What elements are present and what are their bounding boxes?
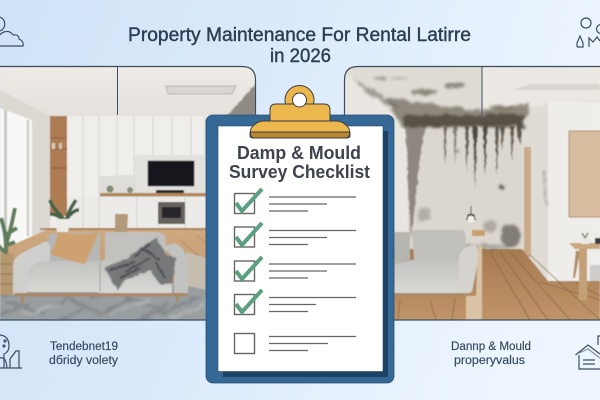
- ceiling: [344, 66, 600, 126]
- checklist heading: Survey Checklist: [229, 162, 370, 182]
- right ceiling and vent: [482, 66, 600, 108]
- sofa: [13, 232, 188, 303]
- caption: left: Tendebnet19: [50, 341, 118, 353]
- wooden shelf niche: [50, 116, 67, 216]
- clip: [250, 86, 350, 138]
- icon: house: [576, 336, 600, 369]
- left wall: [0, 90, 51, 237]
- caption: right: Dannp & Mould: [451, 341, 531, 353]
- desk and plant: [569, 233, 600, 300]
- checklist item 5 unchecked: [234, 334, 356, 354]
- checklist item 3: [234, 257, 356, 281]
- lower mould patches: [417, 148, 546, 250]
- ceiling air vent: [166, 86, 236, 94]
- rug side: [186, 252, 206, 290]
- rug: [0, 284, 206, 320]
- tan cushion: [50, 232, 98, 264]
- checklist item 1: [234, 189, 356, 214]
- side table: [472, 230, 485, 236]
- title: in 2026: [270, 46, 331, 67]
- paper shadow: [223, 131, 388, 377]
- wooden sofa post: [466, 246, 482, 320]
- lower cabinets and oven: [82, 197, 186, 228]
- caption: left: [49, 341, 118, 367]
- tv recess: [134, 155, 206, 195]
- counter: [100, 176, 206, 196]
- side wall: [522, 102, 548, 281]
- ceiling divider: [481, 66, 483, 115]
- door: [524, 147, 531, 257]
- checklist item 4: [234, 290, 356, 314]
- checklist heading: [229, 143, 370, 182]
- mould streaks on wall: [405, 126, 522, 240]
- checklist heading: Damp & Mould: [237, 143, 361, 163]
- paper: [218, 126, 383, 372]
- right wall: [548, 102, 600, 282]
- clipboard: [206, 86, 394, 383]
- window: [0, 108, 32, 252]
- icon: cloud and sun: [0, 17, 23, 46]
- left corner plant in basket: [0, 208, 17, 295]
- kitchen cabinets: [50, 116, 208, 229]
- icon: building figures: [0, 335, 22, 368]
- title: [128, 25, 471, 67]
- floor: [0, 228, 206, 298]
- ceiling divider: [117, 67, 118, 115]
- caption: left: dбridy volety: [49, 355, 118, 367]
- back wall: [408, 126, 522, 249]
- potted plant: [50, 200, 79, 232]
- ceiling corner stain: [226, 84, 255, 115]
- wall art: [569, 131, 600, 217]
- title: Property Maintenance For Rental Latirre: [128, 25, 471, 46]
- hanging lamp: [466, 206, 476, 222]
- wooden floor: [394, 248, 600, 320]
- checklist item 2: [234, 223, 356, 247]
- panel: well-maintained rental room photo: [0, 66, 256, 320]
- caption: right: properyvalus: [454, 355, 525, 367]
- panel border: right photo: [344, 66, 600, 320]
- sofa: [394, 230, 479, 296]
- panel border: left photo: [0, 66, 256, 320]
- left wall: [345, 73, 408, 232]
- ceiling: [0, 66, 256, 118]
- panel: damp and mould room photo: [344, 66, 600, 320]
- mould on ceiling: [352, 76, 530, 127]
- icon: skyline and speech circles: [577, 18, 600, 47]
- grey throw blanket: [104, 238, 176, 290]
- basket on floor: [115, 214, 128, 232]
- tv: [148, 161, 194, 186]
- caption: right: [451, 341, 531, 367]
- clipboard board: [206, 115, 394, 383]
